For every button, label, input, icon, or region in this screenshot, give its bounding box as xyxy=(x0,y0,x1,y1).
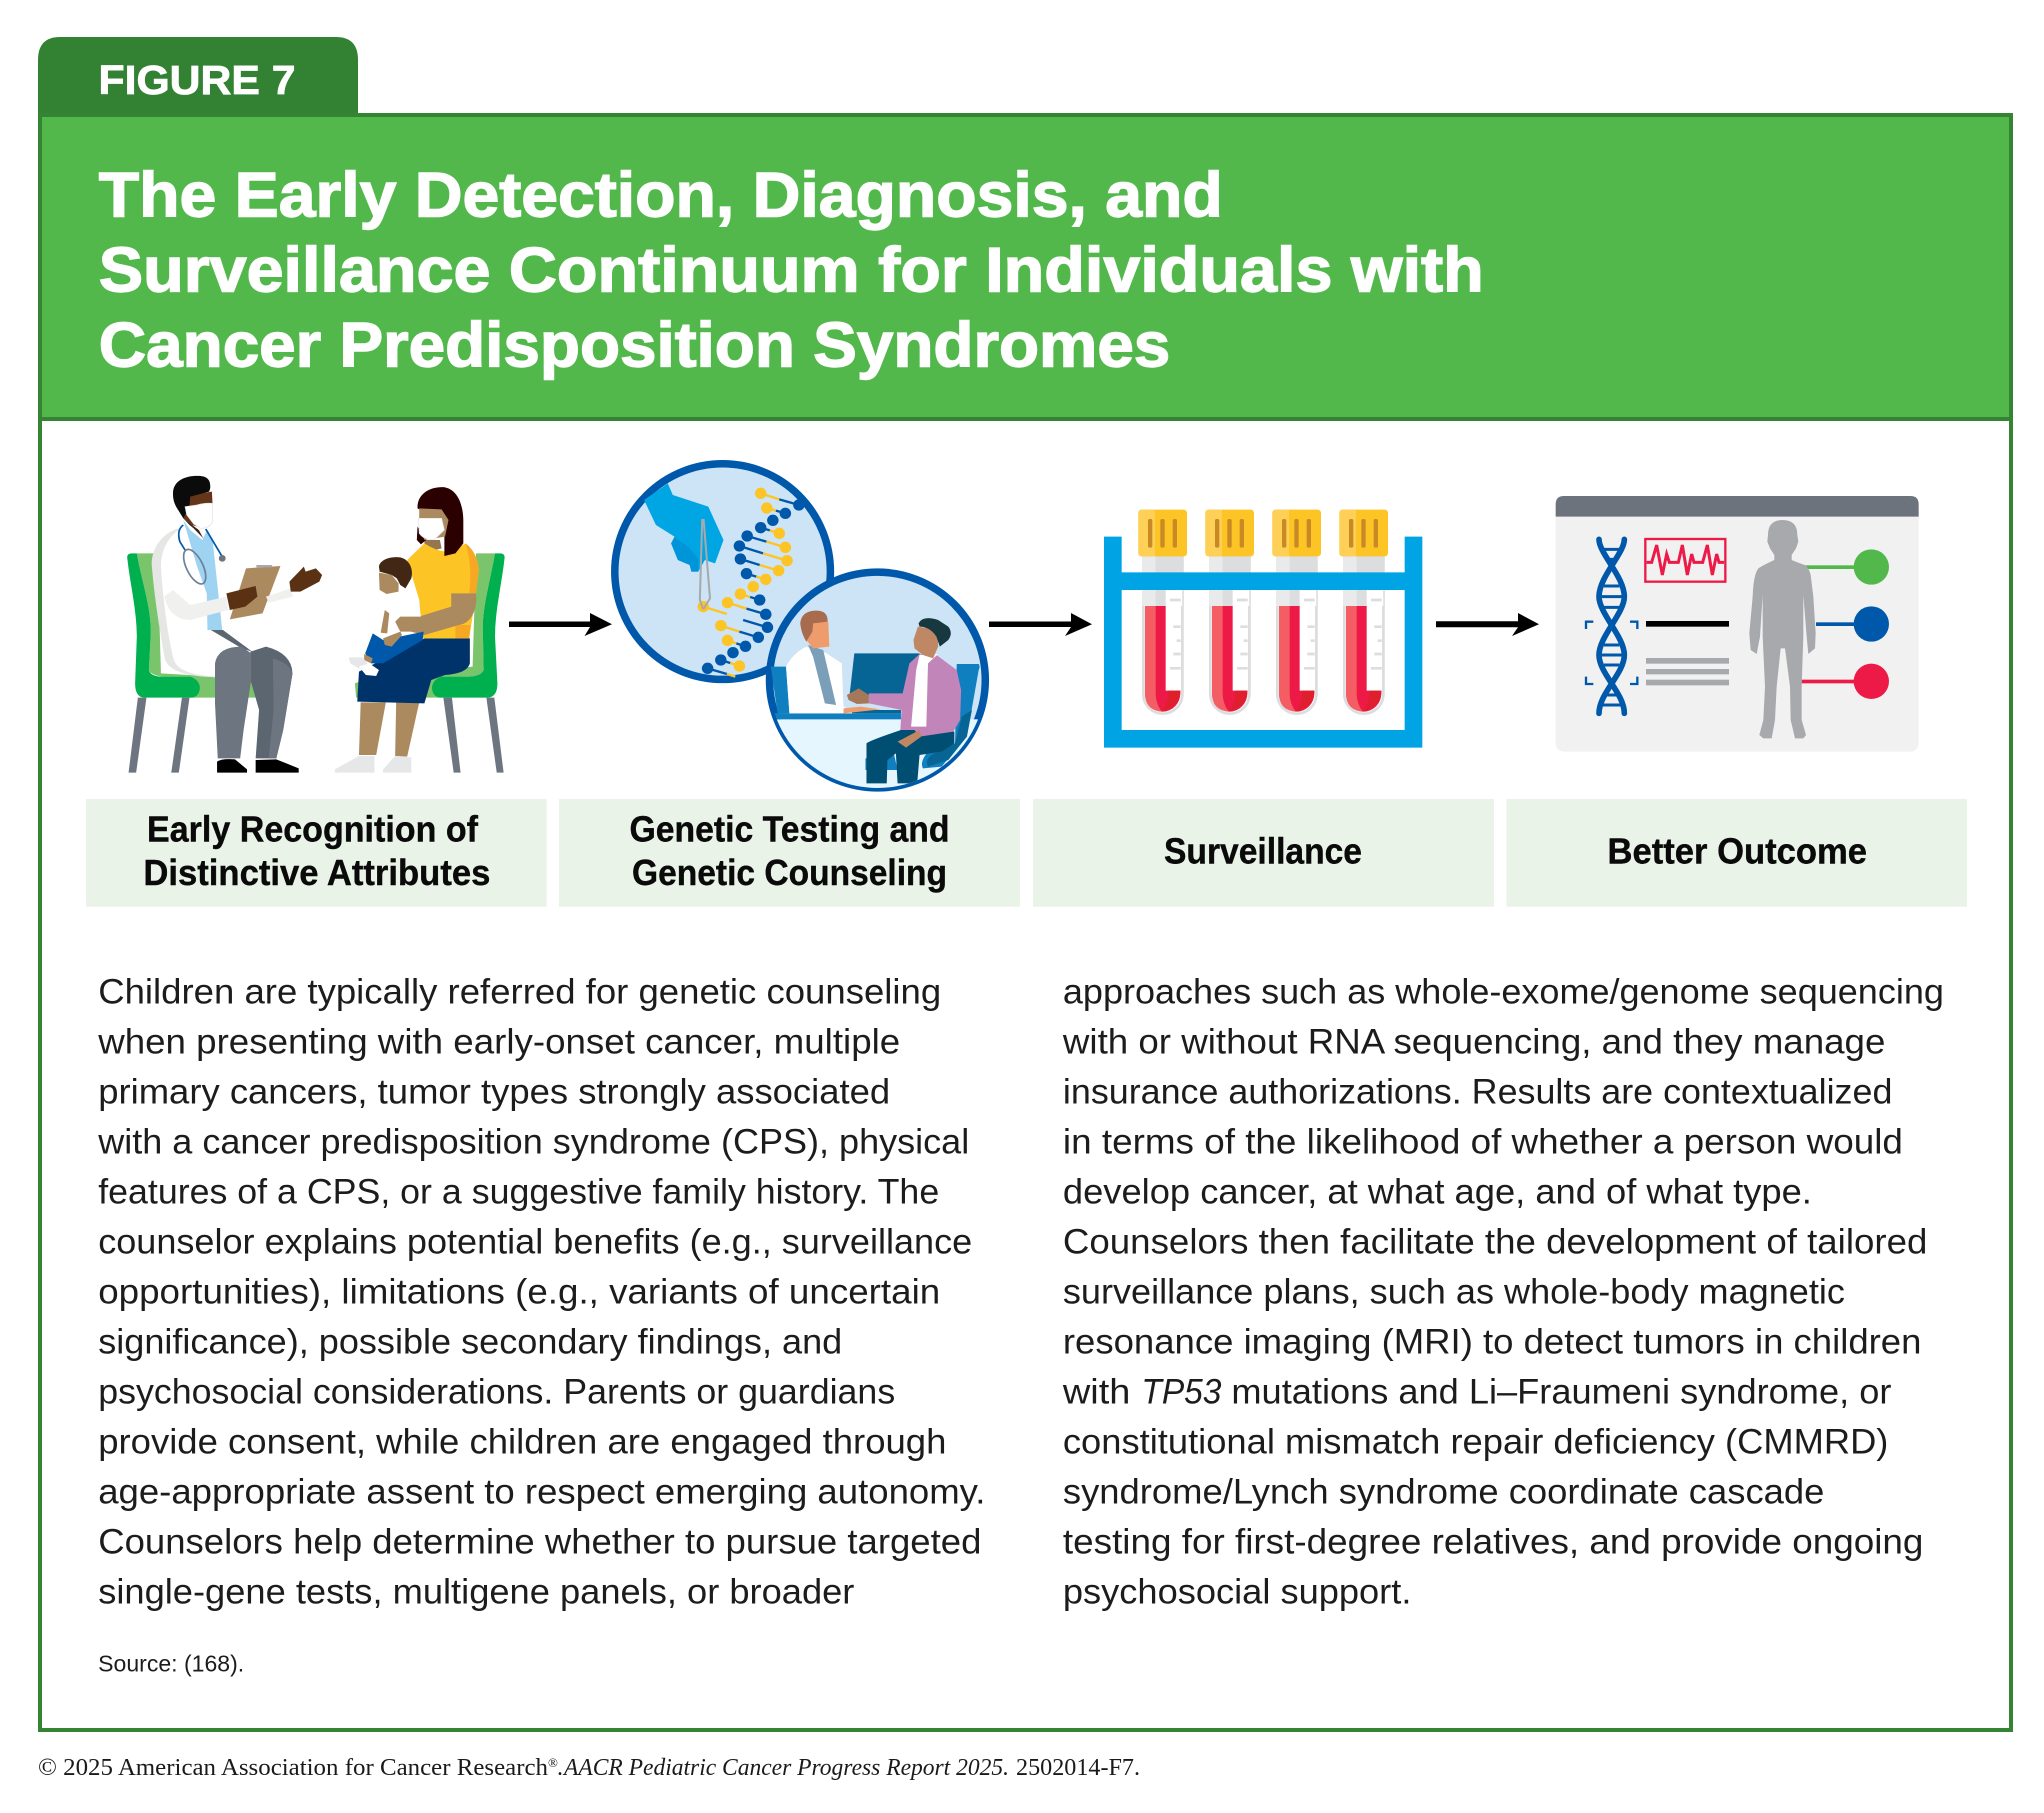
body text: left column: provide consent, while children are engaged through xyxy=(98,1422,946,1461)
body text: right column: Counselors then facilitate the development of tailored xyxy=(1063,1222,1927,1261)
source note: Source: (168). xyxy=(98,1651,244,1677)
illustration: genetic counseling circle xyxy=(766,572,996,796)
body text: right column: with or without RNA sequencing, and they manage xyxy=(1062,1022,1885,1061)
body text: right column: surveillance plans, such as whole-body magnetic xyxy=(1063,1272,1845,1311)
step label: better outcome: Better Outcome xyxy=(1608,830,1867,871)
step label: genetic testing and counseling xyxy=(559,799,1020,907)
body text: left column: Counselors help determine whether to pursue targeted xyxy=(98,1522,981,1561)
body text: left column: when presenting with early-onset cancer, multiple xyxy=(97,1022,900,1061)
DNA strand xyxy=(697,488,805,677)
title: Cancer Predisposition Syndromes xyxy=(99,311,1170,381)
body text: left column: with a cancer predisposition syndrome (CPS), physical xyxy=(97,1122,969,1161)
monitor xyxy=(844,653,920,713)
step label: genetic testing and counseling: Genetic Counseling xyxy=(632,852,947,893)
body text: right column: approaches such as whole-exome/genome sequencing xyxy=(1063,972,1944,1011)
arrow 2 xyxy=(989,613,1092,636)
body text: right column: mutations and Li–Fraumeni syndrome, or xyxy=(1231,1372,1892,1411)
body text: left column: opportunities), limitations (e.g., variants of uncertain xyxy=(98,1272,940,1311)
figure tab xyxy=(38,37,358,115)
report lines xyxy=(1646,621,1729,685)
desk and floor xyxy=(771,666,978,788)
DNA helix xyxy=(1586,539,1637,713)
illustration: results dashboard xyxy=(1556,496,1919,752)
step label: early recognition: Early Recognition of xyxy=(147,809,479,850)
body text: left column: Children are typically referred for genetic counseling xyxy=(98,972,941,1011)
tube 4 xyxy=(1339,510,1388,714)
chair and patient xyxy=(847,618,980,783)
body text: left column: age-appropriate assent to respect emerging autonomy. xyxy=(98,1472,985,1511)
illustration: genetic testing circle xyxy=(615,464,830,679)
left chair xyxy=(127,553,260,773)
child silhouette xyxy=(1749,520,1816,738)
body text: left column: single-gene tests, multigene panels, or broader xyxy=(98,1572,855,1611)
gloved hand with tweezers xyxy=(644,483,724,609)
body text: left column: significance), possible secondary findings, and xyxy=(98,1322,842,1361)
header band with title xyxy=(40,115,2011,419)
body text: right column: resonance imaging (MRI) to detect tumors in children xyxy=(1063,1322,1921,1361)
copyright footer: . xyxy=(557,1755,563,1781)
step label: better outcome xyxy=(1506,799,1967,907)
step label: genetic testing and counseling: Genetic Testing and xyxy=(630,809,950,850)
step label: early recognition: Distinctive Attributes xyxy=(143,852,490,893)
tube 3 xyxy=(1272,510,1321,714)
copyright footer: 2502014-F7. xyxy=(1016,1755,1140,1781)
card xyxy=(1556,496,1919,752)
body text: right column: constitutional mismatch repair deficiency (CMMRD) xyxy=(1063,1422,1888,1461)
title xyxy=(99,161,1484,381)
body text: right column: TP53 xyxy=(1141,1372,1222,1411)
step label: early recognition xyxy=(86,799,547,907)
illustration: blood tubes in rack xyxy=(1104,510,1422,748)
body text: right column: syndrome/Lynch syndrome coordinate cascade xyxy=(1063,1472,1824,1511)
mother xyxy=(335,487,479,773)
connector lines and dots xyxy=(1802,549,1889,699)
body text: left column xyxy=(97,972,985,1611)
body text: right column: with xyxy=(1062,1372,1130,1411)
illustration: doctor with mother and child xyxy=(127,476,505,773)
copyright footer: © 2025 American Association for Cancer Research xyxy=(38,1755,548,1781)
body text: right column: psychosocial support. xyxy=(1063,1572,1411,1611)
counselor xyxy=(786,611,857,713)
doctor xyxy=(152,476,322,773)
body text: left column: primary cancers, tumor types strongly associated xyxy=(98,1072,890,1111)
rack xyxy=(1104,537,1422,748)
body text: right column: develop cancer, at what age, and of what type. xyxy=(1063,1172,1812,1211)
tube 1 xyxy=(1138,510,1187,714)
tube 2 xyxy=(1205,510,1254,714)
copyright footer xyxy=(38,1755,1140,1781)
body text: right column: insurance authorizations. Results are contextualized xyxy=(1063,1072,1892,1111)
body text: right column xyxy=(1062,972,1944,1611)
body text: left column: features of a CPS, or a suggestive family history. The xyxy=(98,1172,939,1211)
figure tab: FIGURE 7 xyxy=(98,57,296,103)
step label: surveillance xyxy=(1033,799,1494,907)
title: Surveillance Continuum for Individuals with xyxy=(99,236,1484,306)
body text: right column: in terms of the likelihood of whether a person would xyxy=(1063,1122,1903,1161)
body text: right column: testing for first-degree relatives, and provide ongoing xyxy=(1063,1522,1923,1561)
step label: surveillance: Surveillance xyxy=(1164,830,1362,871)
arrow 1 xyxy=(509,613,612,636)
ECG monitor xyxy=(1645,539,1725,582)
copyright footer: ® xyxy=(548,1755,558,1770)
title: The Early Detection, Diagnosis, and xyxy=(99,161,1223,231)
copyright footer: AACR Pediatric Cancer Progress Report 2025. xyxy=(562,1755,1009,1781)
child xyxy=(349,557,424,676)
body text: left column: psychosocial considerations. Parents or guardians xyxy=(98,1372,895,1411)
arrow 3 xyxy=(1436,613,1539,636)
body text: left column: counselor explains potential benefits (e.g., surveillance xyxy=(98,1222,972,1261)
right chair xyxy=(355,553,505,773)
